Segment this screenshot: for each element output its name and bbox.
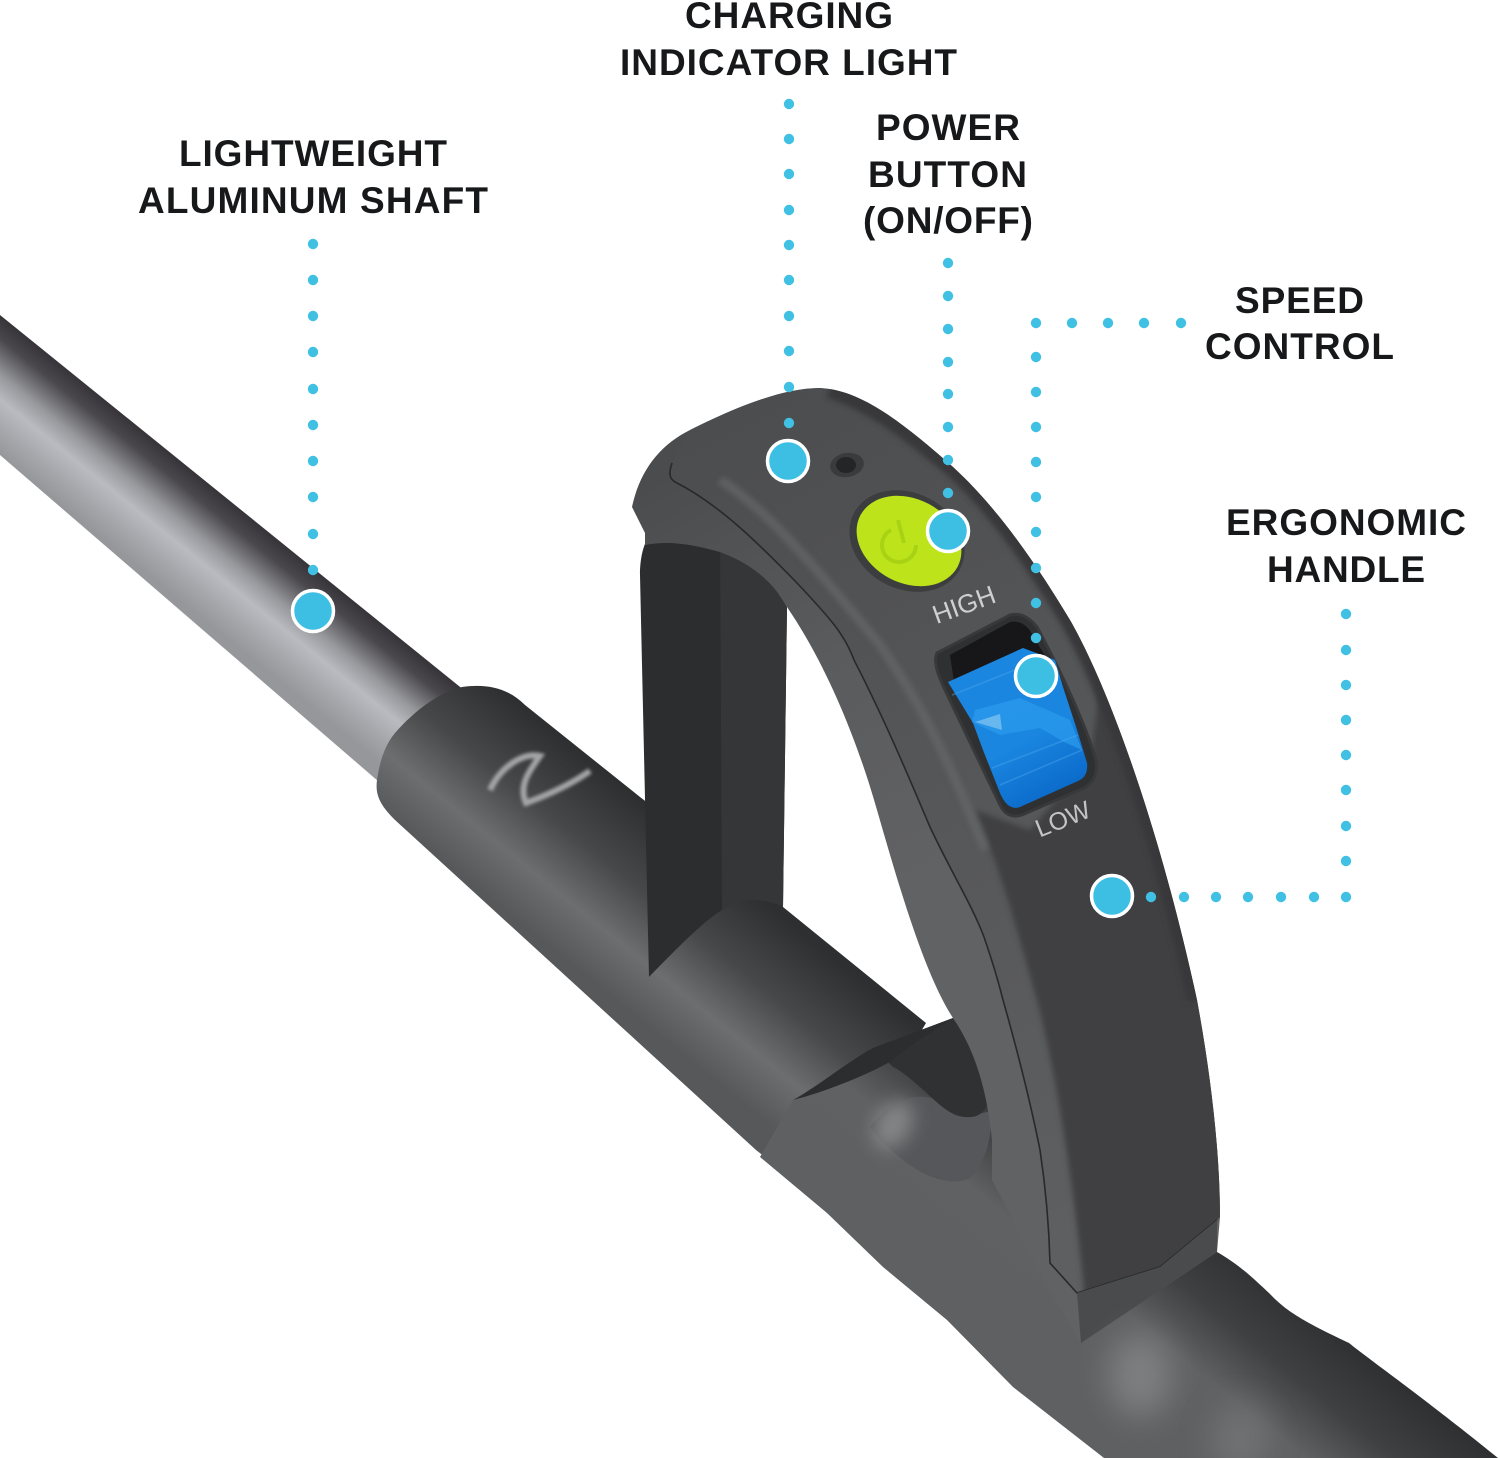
label: LIGHTWEIGHT	[179, 133, 447, 174]
handle rear post	[640, 525, 787, 977]
label: HANDLE	[1267, 549, 1425, 590]
aluminum shaft	[0, 315, 470, 800]
handle seam line	[670, 463, 1217, 1293]
rubber sleeve and upper tube	[377, 686, 926, 1200]
charging indicator LED	[828, 450, 866, 480]
label: POWER	[876, 107, 1020, 148]
label	[863, 107, 1033, 241]
callout: charging indicator light	[620, 0, 957, 482]
callout: power button	[863, 107, 1033, 552]
blue speed switch	[948, 648, 1087, 808]
label: ERGONOMIC	[1226, 502, 1466, 543]
label: CONTROL	[1205, 326, 1394, 367]
dotted leader	[1146, 609, 1351, 902]
label: SPEED	[1235, 280, 1364, 321]
dotted leader	[1031, 318, 1186, 643]
dotted leader	[784, 99, 794, 428]
callout: ergonomic handle	[1092, 502, 1466, 916]
marker	[928, 510, 968, 552]
handle side band	[632, 388, 1220, 1343]
pocket highlight	[864, 1093, 922, 1157]
marker	[768, 440, 808, 482]
slot opening	[950, 622, 1045, 688]
label	[1226, 502, 1466, 590]
product: trimmer handle and shaft	[0, 315, 1498, 1458]
label: (ON/OFF)	[863, 200, 1033, 241]
power button	[831, 470, 983, 612]
handle front face	[670, 388, 1225, 1300]
LOW label: LOW	[1031, 796, 1095, 843]
label: ALUMINUM SHAFT	[138, 180, 488, 221]
label	[620, 0, 957, 83]
label: BUTTON	[868, 154, 1027, 195]
label	[138, 133, 488, 221]
marker	[1016, 656, 1056, 696]
callout: speed control	[1016, 280, 1394, 696]
lower pocket	[870, 1097, 991, 1182]
dotted leader	[943, 258, 953, 498]
wing crease	[793, 1018, 953, 1100]
marker	[292, 590, 334, 632]
logo mark on sleeve	[490, 755, 590, 803]
tube highlights	[1108, 1333, 1268, 1458]
marker	[1092, 876, 1132, 916]
label	[1205, 280, 1394, 367]
dotted leader	[308, 239, 318, 575]
lower body and main tube	[760, 1018, 1498, 1458]
handle base crease	[1077, 1220, 1217, 1343]
callout: lightweight aluminum shaft	[138, 133, 488, 632]
hand opening shadow	[873, 1018, 988, 1117]
HIGH label: HIGH	[928, 579, 1000, 630]
label: INDICATOR LIGHT	[620, 42, 957, 83]
speed slider slot	[936, 614, 1096, 816]
